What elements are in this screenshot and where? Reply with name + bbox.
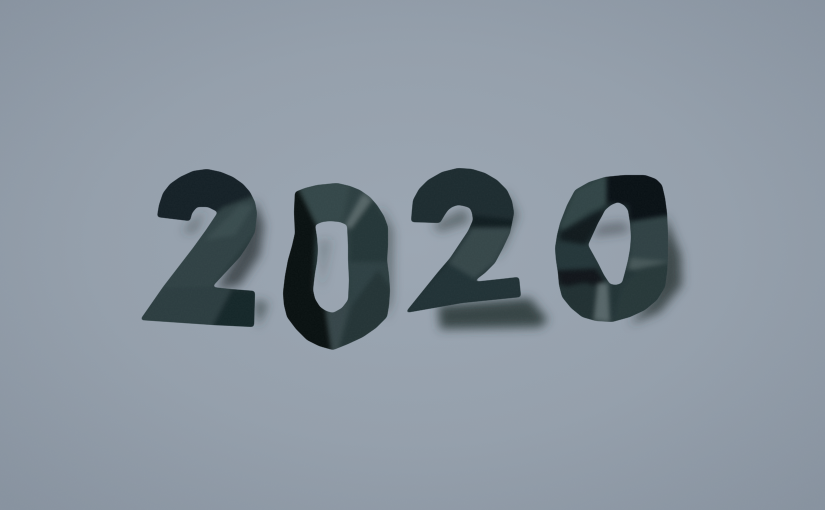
digit: first 0 <box>280 180 392 352</box>
lower right facet <box>614 316 632 322</box>
right facets <box>351 203 388 260</box>
top facet <box>299 183 345 222</box>
top left crumple <box>560 175 606 230</box>
bottom right dark facet <box>214 289 256 327</box>
left mid facet <box>555 248 558 268</box>
middle lighter diagonal band <box>164 196 256 287</box>
pale crease <box>345 193 372 230</box>
digit: second 2 <box>407 168 521 312</box>
top dark fold <box>157 169 253 221</box>
top arc <box>411 168 514 224</box>
pale crease <box>594 283 610 322</box>
right mid facet <box>630 216 670 262</box>
left black fold <box>282 190 333 350</box>
top right black fold <box>604 172 670 222</box>
digit: first 2 <box>142 169 257 327</box>
foot <box>407 267 521 312</box>
digit: second 0 <box>552 172 672 324</box>
lower left facet <box>142 319 210 325</box>
lower left facet <box>568 282 591 320</box>
dark underside <box>470 216 512 227</box>
cast shadows <box>182 190 682 329</box>
lighter diagonal facet <box>448 228 514 279</box>
